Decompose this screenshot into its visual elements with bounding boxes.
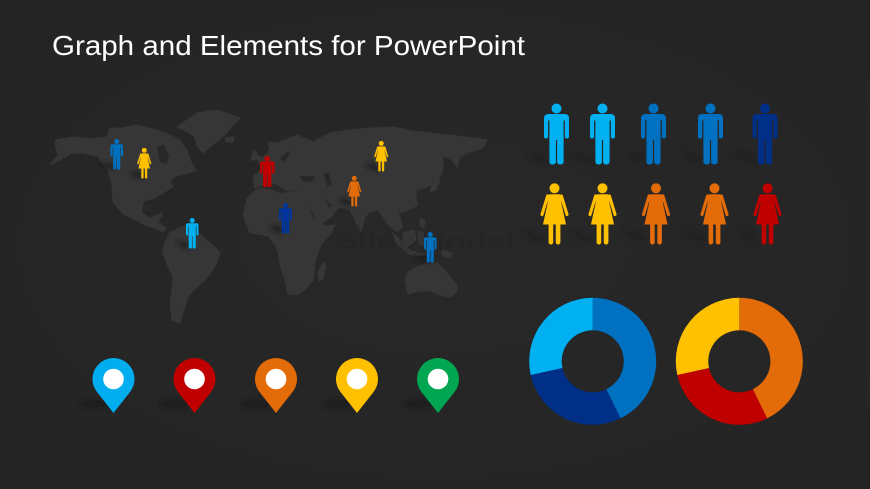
segment: medium blue	[593, 298, 656, 418]
Madagascar	[318, 262, 326, 281]
icon: man navy	[732, 104, 778, 166]
title: Graph and Elements for PowerPoint	[52, 30, 525, 61]
icon: red pin	[161, 358, 216, 413]
icon: man cyan 1	[524, 104, 569, 166]
people icons: women row	[521, 183, 780, 245]
segment: orange	[739, 298, 803, 418]
donut chart: warm	[676, 298, 803, 425]
icon: woman orange 2	[681, 183, 727, 245]
segment: cyan	[529, 298, 593, 375]
figure: orange woman, Central Asia	[339, 176, 360, 207]
segment: red	[677, 368, 767, 425]
Australia	[405, 263, 457, 297]
icon: man blue 2	[678, 104, 723, 166]
icon: man blue 1	[621, 104, 666, 166]
world map	[50, 110, 487, 323]
South America	[163, 225, 220, 323]
figure: cyan man, South America	[177, 218, 198, 250]
UK and Iceland	[225, 137, 257, 160]
icon: man cyan 2	[570, 104, 615, 166]
figure: yellow woman, Russia	[366, 141, 388, 172]
icon: woman yellow 2	[569, 183, 615, 245]
North America	[50, 125, 196, 232]
segment: yellow	[676, 298, 739, 375]
map figures	[102, 139, 436, 264]
figure: navy man, Africa	[270, 203, 292, 234]
figure: red man, Europe	[260, 156, 274, 187]
figure: blue man, Indonesia	[415, 232, 436, 264]
icon: woman yellow 1	[521, 183, 567, 245]
Greenland	[177, 110, 240, 153]
watermark: SlideModel	[335, 228, 515, 255]
icon: orange pin	[242, 358, 297, 413]
icon: green pin	[404, 358, 459, 413]
icon: cyan pin	[80, 358, 134, 413]
Indonesia and islands	[392, 147, 455, 258]
icon: yellow pin	[323, 358, 378, 413]
icon: woman orange 1	[622, 183, 668, 245]
icon: woman red	[734, 183, 780, 245]
people icons: men row	[524, 104, 778, 166]
Africa	[243, 187, 335, 295]
inland seas	[144, 145, 333, 220]
segment: navy	[531, 368, 620, 425]
figure: yellow woman, North America	[130, 148, 150, 180]
map pins	[80, 358, 459, 413]
figure: blue man, North America	[102, 139, 123, 171]
Eurasia	[253, 127, 487, 232]
donut chart: blue	[529, 298, 656, 425]
